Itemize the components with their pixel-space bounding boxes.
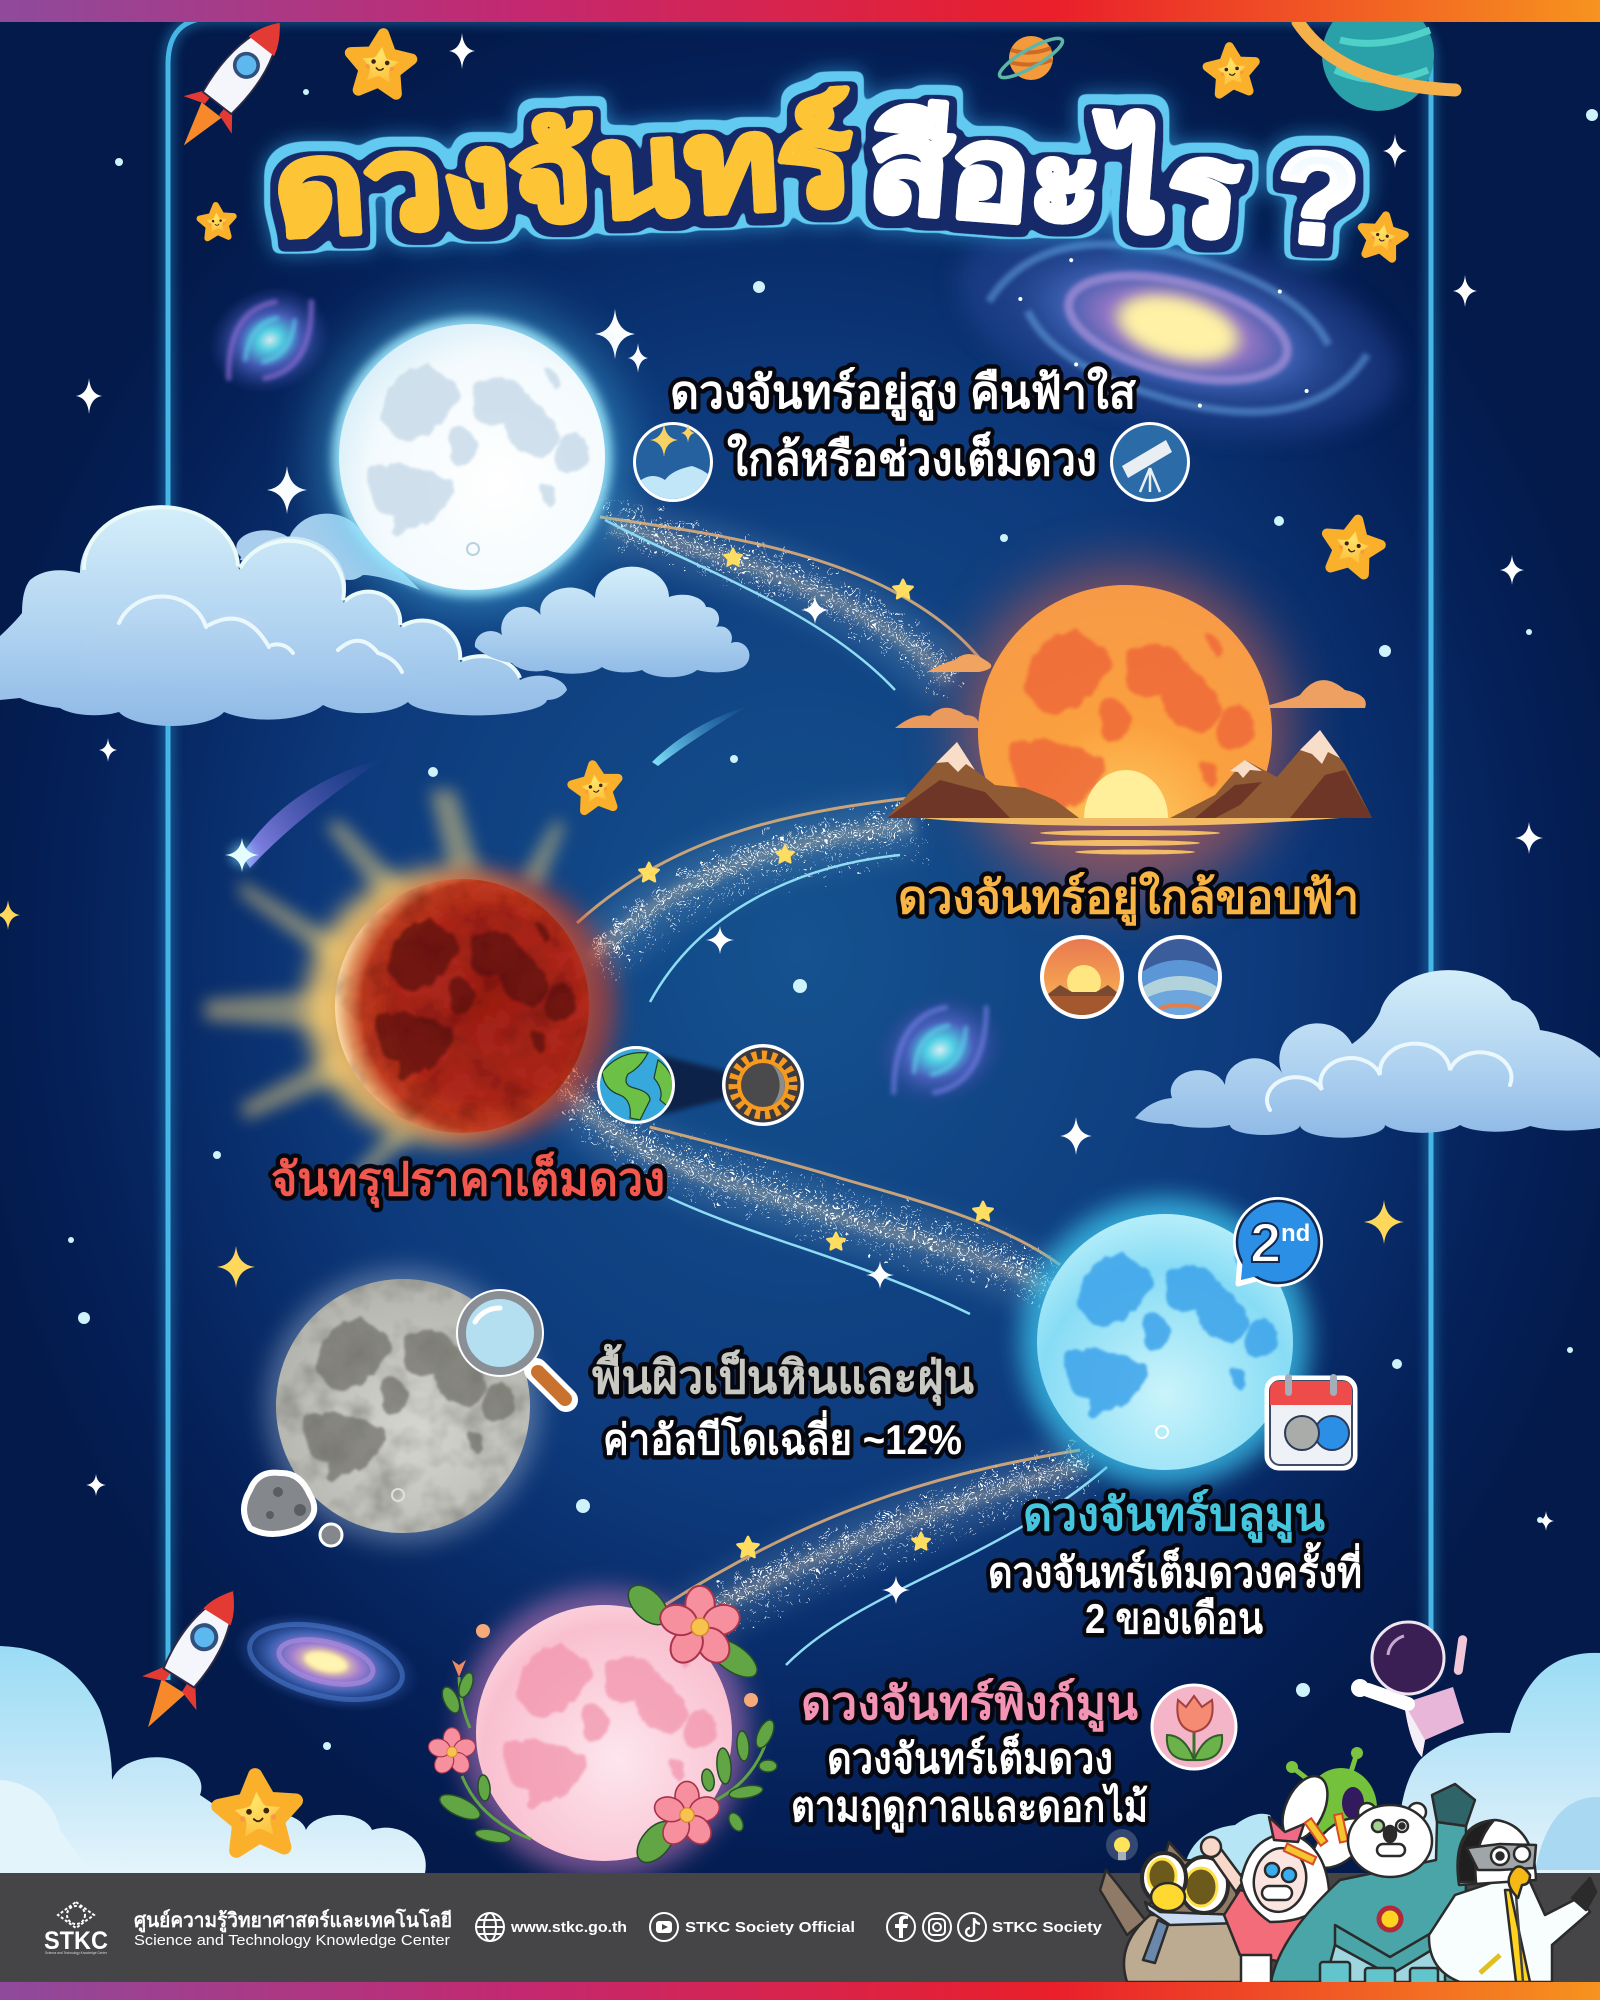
galaxy: large purple: [936, 180, 1420, 476]
label: gray moon: ค่าอัลบีโดเฉลี่ย ~12%: [603, 1410, 962, 1463]
stardust trail 2: orange moon to red moon: [577, 795, 935, 1002]
footer: logo: STKC: [44, 1927, 108, 1955]
mascot: girl in bunny hood: [1201, 1769, 1376, 1985]
moon: pink: [459, 1588, 749, 1878]
astronaut: [1351, 1622, 1468, 1757]
icon: calendar: [1267, 1374, 1355, 1468]
footer: organisation name: ศูนย์ความรู้วิทยาศาสตร์และเทคโนโลยี: [134, 1908, 452, 1934]
cloud: large upper left: [0, 507, 567, 726]
stardust trail 4: blue moon to pink moon: [665, 1449, 1107, 1665]
sun: [1084, 770, 1168, 818]
footer: logo: Science and Technology Knowledge Center: [45, 1951, 108, 1955]
icon: tulip: [1152, 1685, 1236, 1769]
icon: atmosphere layers: [1138, 935, 1222, 1019]
label: pink moon: ตามฤดูกาลและดอกไม้: [791, 1782, 1148, 1833]
footer: organisation name: [134, 1908, 452, 1949]
cloud: small right of left group: [475, 567, 749, 677]
label: pink moon: ดวงจันทร์เต็มดวง: [827, 1733, 1113, 1782]
smiling stars: [199, 31, 1407, 812]
comet: purple: [225, 758, 385, 872]
smiling star on bottom cloud: [216, 1773, 299, 1852]
footer: organisation name: Science and Technology Knowledge Center: [134, 1932, 450, 1949]
moon: white: [322, 307, 622, 607]
footer: website: www.stkc.go.th: [510, 1919, 627, 1936]
flowers and leaves around pink moon: [426, 1578, 778, 1869]
title: ดวงจันทร์: [271, 88, 856, 263]
icon: magnifying glass: [456, 1289, 566, 1400]
galaxy: lower left: [222, 1596, 430, 1728]
icon: earth and shadow: [597, 1046, 725, 1124]
label: pink moon: ดวงจันทร์พิงก์มูน: [801, 1677, 1139, 1732]
cloud: right: [1135, 970, 1600, 1138]
label: white moon: ใกล้หรือช่วงเต็มดวง: [727, 431, 1097, 485]
moon: gray: [265, 1268, 541, 1544]
mascot: penguin: [1429, 1820, 1596, 1982]
rocket: bottom: [121, 1574, 260, 1744]
bottom gradient bar: [0, 1982, 1600, 2000]
label: gray moon: พื้นผิวเป็นหินและฝุ่น: [592, 1343, 975, 1406]
moon: blue: [1020, 1197, 1310, 1487]
mascot: polar bear: [1271, 1784, 1475, 1984]
icon: eclipse: [722, 1044, 804, 1126]
moon: eclipse red: [205, 790, 616, 1180]
planet: small ringed: [995, 32, 1067, 84]
mascot: owl: [1100, 1842, 1245, 1982]
stardust trail 1: white moon to orange moon: [600, 501, 985, 696]
label: pink moon: [791, 1677, 1148, 1833]
mountains: [887, 742, 1079, 818]
cloud: bottom left: [0, 1646, 426, 1873]
icon: rock: [244, 1473, 342, 1546]
label: blue moon: ดวงจันทร์เต็มดวงครั้งที่: [988, 1541, 1362, 1596]
label: horizon moon: ดวงจันทร์อยู่ใกล้ขอบฟ้า: [898, 870, 1359, 926]
galaxy: small cyan upper left: [194, 270, 346, 410]
footer: website: [476, 1913, 627, 1941]
planet: large ringed: [1298, 0, 1455, 111]
title: สีอะไร ?: [864, 91, 1364, 274]
light bulb: [1106, 1829, 1138, 1861]
footer: logo: [44, 1902, 108, 1955]
glowing frame: [168, 18, 1431, 1680]
icon: clear night sky: [633, 422, 713, 502]
icon: telescope: [1110, 422, 1190, 502]
footer: social: [887, 1913, 1103, 1941]
icon: 2nd badge: 2: [1250, 1211, 1281, 1274]
footer: social: STKC Society: [992, 1919, 1103, 1936]
stardust trail 3: red moon to blue moon: [561, 1061, 1060, 1314]
small clouds: [895, 708, 979, 728]
water: [920, 818, 1340, 854]
label: white moon: ดวงจันทร์อยู่สูง คืนฟ้าใส: [670, 365, 1137, 421]
cloud: back of upper left: [236, 514, 420, 590]
comet: small cyan: [652, 706, 748, 766]
label: blue moon: [988, 1488, 1362, 1642]
footer: youtube: STKC Society Official: [685, 1919, 855, 1936]
galaxy: cyan middle: [857, 974, 1023, 1126]
alien: [1286, 1747, 1377, 1848]
footer band: [0, 1873, 1600, 1983]
cloud: behind mascots: [1183, 1814, 1300, 1873]
title: [271, 88, 1364, 274]
icon: 2nd badge: [1233, 1197, 1323, 1287]
label: blue moon: ดวงจันทร์บลูมูน: [1023, 1488, 1326, 1543]
icon: 2nd badge: nd: [1281, 1220, 1310, 1247]
label: white moon: [670, 365, 1137, 485]
label: blue moon: 2 ของเดือน: [1085, 1595, 1263, 1642]
cloud: bottom right: [1398, 1653, 1600, 1873]
icon: sunset: [1040, 935, 1124, 1020]
moon: orange horizon scene: [887, 567, 1372, 897]
label: gray moon: [592, 1343, 975, 1463]
rocket: top: [160, 4, 304, 164]
label: eclipse: จันทรุปราคาเต็มดวง: [271, 1151, 665, 1208]
footer: youtube: [650, 1913, 855, 1941]
top gradient bar: [0, 0, 1600, 22]
exclamation marks: [1284, 1813, 1348, 1864]
